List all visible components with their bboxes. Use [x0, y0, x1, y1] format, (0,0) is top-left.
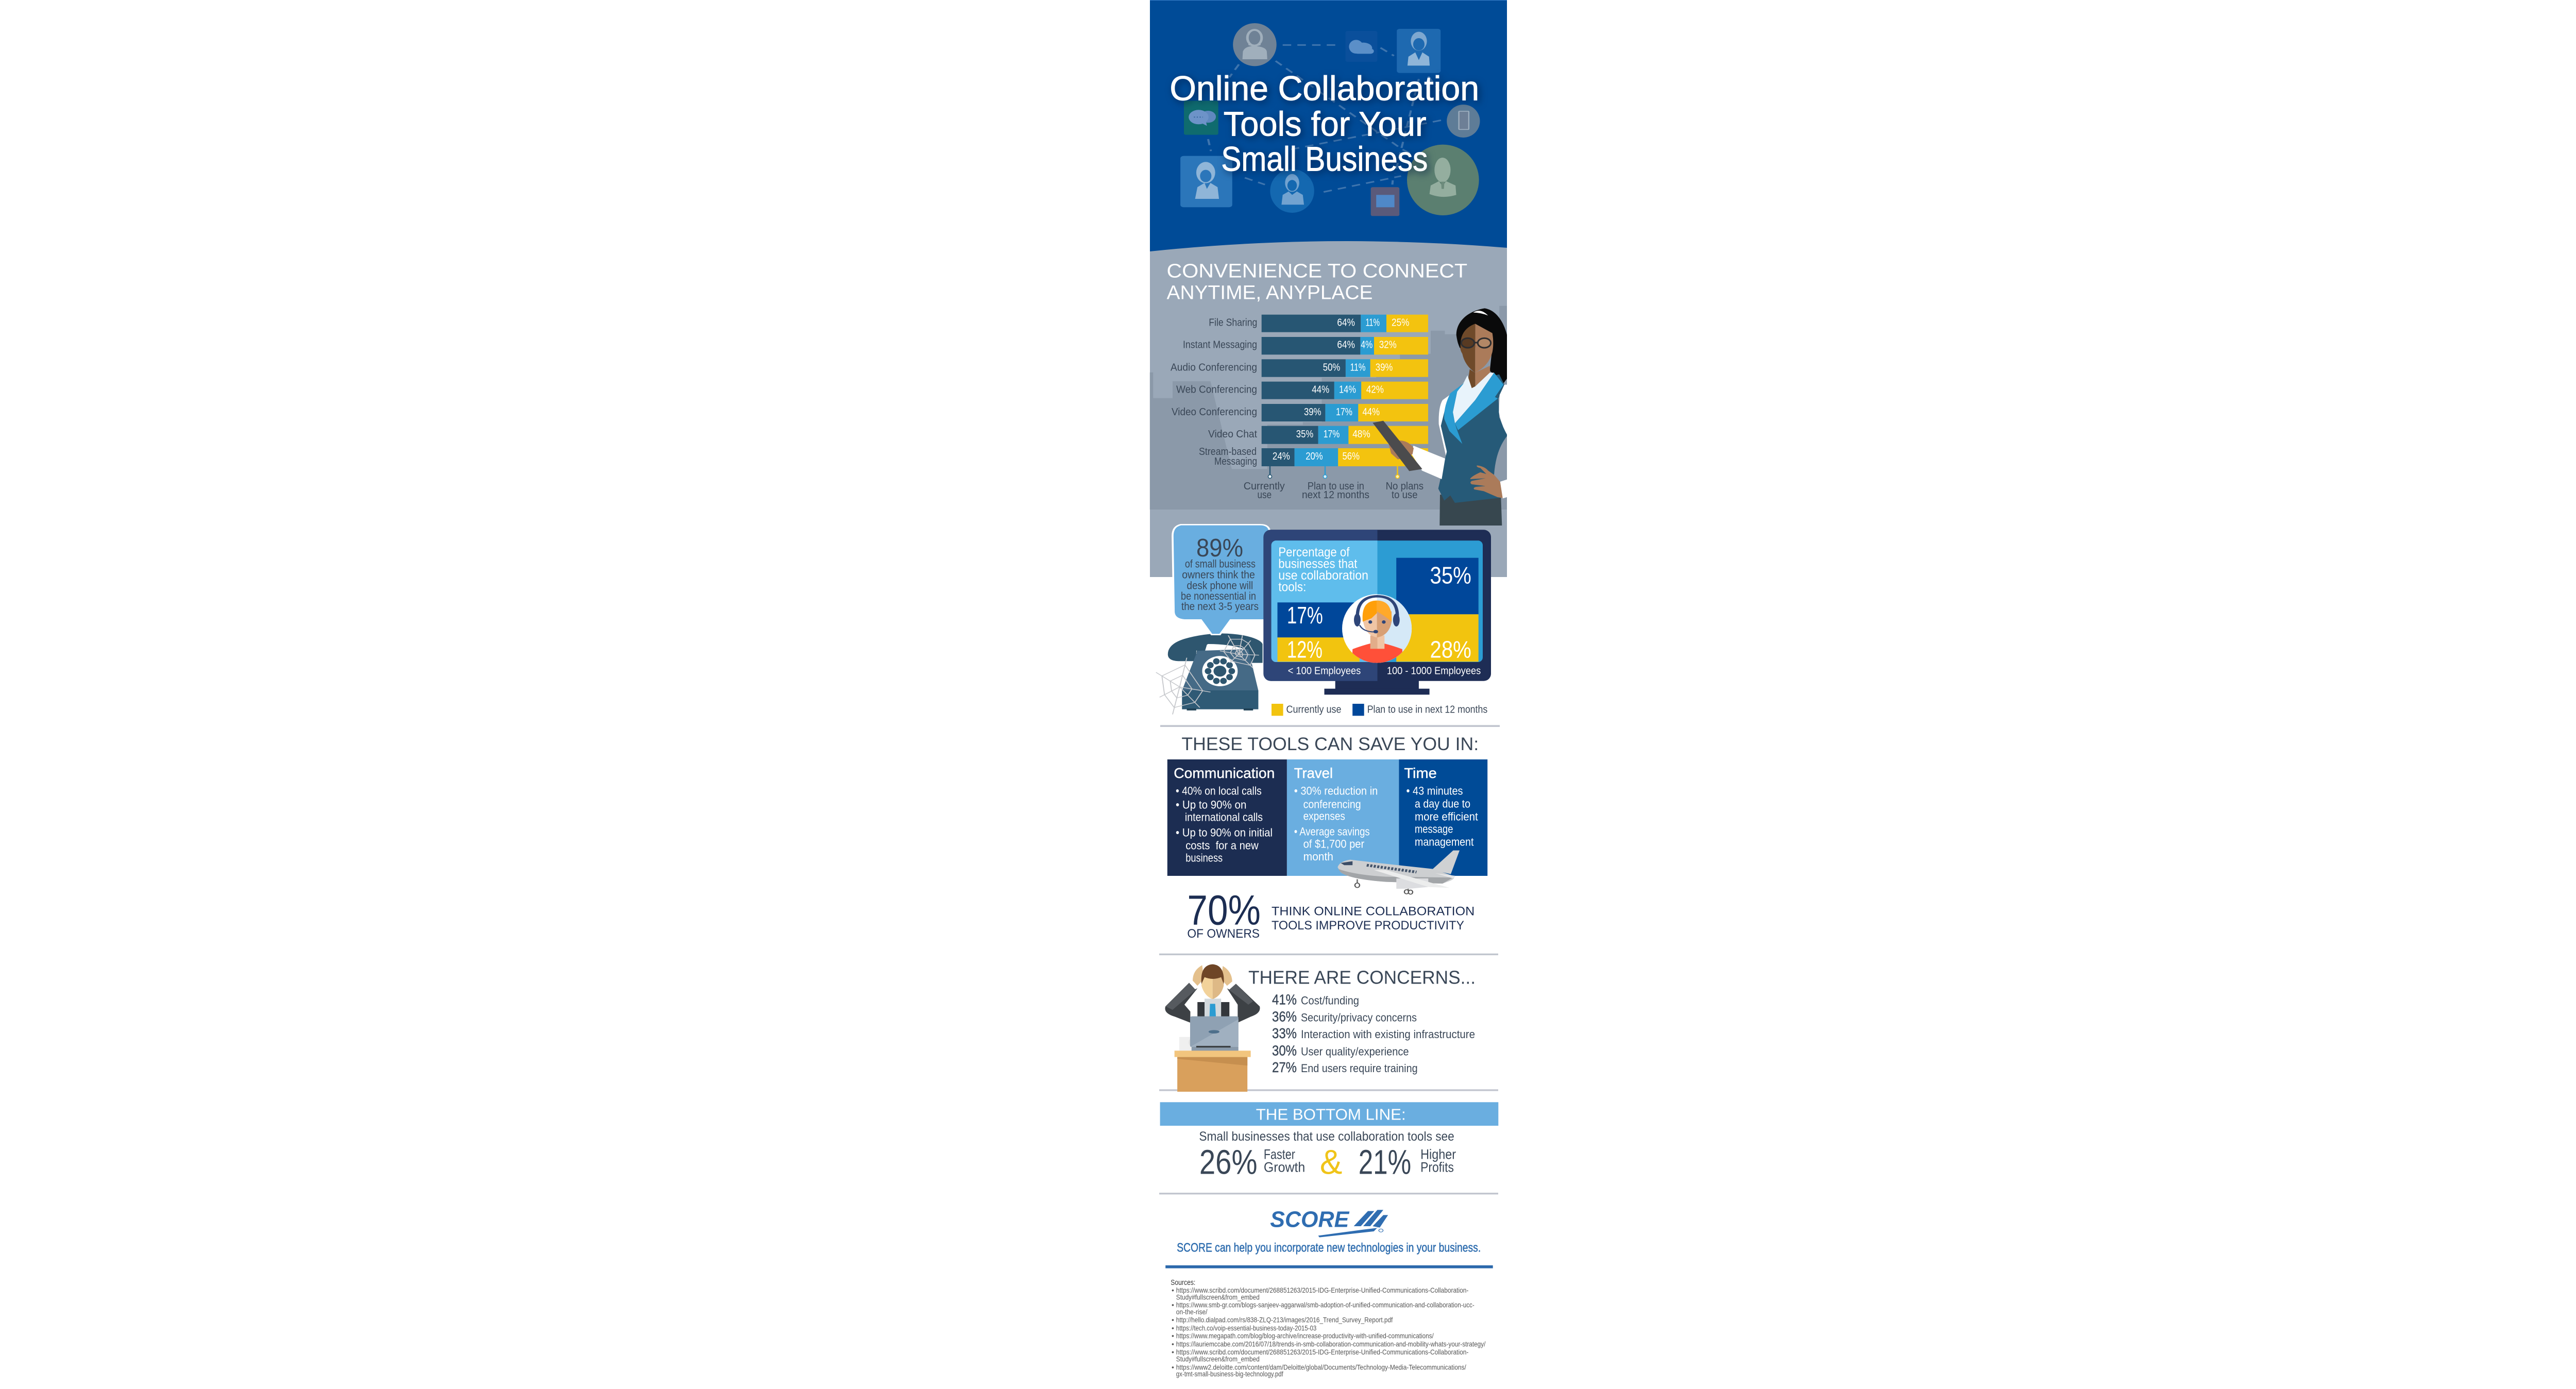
row: Audio Conferencing: 11% [1350, 362, 1366, 373]
chart values: 12% [1287, 636, 1323, 663]
illustration: businesswoman with tablet [1372, 308, 1507, 526]
legend: bar colours: Plan to use in [1308, 481, 1364, 492]
row: Video Chat: 35% [1296, 429, 1313, 440]
stat: 26% faster growth: Growth [1264, 1159, 1305, 1175]
chart heading: use collaboration [1278, 568, 1368, 583]
callout: 89% speech bubble: 89% [1196, 534, 1243, 562]
row: Video Conferencing: Video Conferencing [1172, 406, 1257, 418]
heading: these tools can save you in: THESE TOOLS CAN SAVE YOU IN: [1181, 734, 1479, 754]
stat: 21% higher profits: 21% [1359, 1143, 1411, 1181]
sources list: on-the-rise/ [1176, 1308, 1208, 1316]
row: Web Conferencing: 14% [1339, 384, 1356, 395]
row: Stream-based Messaging [1199, 446, 1428, 467]
list: concerns with percentages: Security/privacy concerns [1301, 1011, 1417, 1024]
column: time: message [1415, 823, 1453, 836]
sources list: • [1172, 1301, 1174, 1309]
row: Video Conferencing: 17% [1336, 406, 1352, 418]
row: Instant Messaging: Instant Messaging [1183, 340, 1257, 351]
column: communication: business [1185, 852, 1223, 865]
column: time: management [1415, 836, 1473, 849]
logo: SCORE [1270, 1207, 1388, 1238]
column: travel: expenses [1303, 810, 1345, 823]
callout: 89% speech bubble [1173, 524, 1269, 635]
illustration: old telephone with cobwebs [1156, 634, 1263, 715]
chart: monitor with employee-size columns [1263, 530, 1491, 694]
chart heading: Percentage of [1278, 545, 1349, 560]
panel: convenience to connect [1150, 241, 1507, 577]
row: Audio Conferencing: 39% [1376, 362, 1393, 373]
stat: 70% of owners [1187, 887, 1475, 941]
section: desk phone and monitor [1156, 524, 1491, 716]
sources list: • [1172, 1363, 1174, 1371]
banner [1160, 1102, 1498, 1126]
chart heading: businesses that [1278, 557, 1357, 571]
row: Web Conferencing: Web Conferencing [1176, 384, 1257, 395]
row: File Sharing: 11% [1365, 317, 1380, 329]
banner: THE BOTTOM LINE: [1256, 1105, 1406, 1123]
row: Video Chat: 48% [1352, 429, 1370, 440]
chart values: 28% [1430, 636, 1471, 663]
panel: savings columns [1167, 759, 1487, 894]
sources list [1171, 1278, 1485, 1378]
illustration: stressed man at desk [1165, 964, 1260, 1092]
sources list: • [1172, 1332, 1174, 1340]
row: File Sharing [1209, 315, 1428, 332]
title: Small Business [1221, 140, 1428, 179]
axis labels: 100 - 1000 Employees [1387, 665, 1481, 676]
row: Stream-based Messaging: Stream-based [1199, 446, 1257, 458]
stat: 70% of owners: 70% [1187, 887, 1261, 934]
sources list: https://www.smb-gr.com/blogs-sanjeev-aggarwal/smb-adoption-of-unified-communication-and-collaboration-ucc- [1176, 1301, 1475, 1309]
column: communication: Communication [1174, 765, 1275, 781]
row: Instant Messaging [1183, 337, 1428, 354]
legend: monitor chart [1272, 704, 1487, 716]
stat: 70% of owners: THINK ONLINE COLLABORATION [1272, 905, 1475, 919]
column: travel: month [1303, 850, 1333, 863]
stat: 21% higher profits: Profits [1420, 1159, 1454, 1175]
tagline: SCORE can help you incorporate new technologies in your business. [1177, 1241, 1481, 1255]
legend: bar colours: to use [1392, 489, 1418, 501]
chart values [1287, 562, 1471, 663]
illustration: network of people and devices [1180, 23, 1480, 216]
axis labels: < 100 Employees [1288, 665, 1361, 676]
column: time [1399, 759, 1487, 876]
stat: 26% faster growth: 26% [1199, 1143, 1257, 1181]
sources list: Sources: [1171, 1278, 1195, 1287]
axis labels [1288, 665, 1481, 676]
stat: 70% of owners: OF OWNERS [1187, 927, 1260, 941]
sources list: • [1172, 1340, 1174, 1348]
list: concerns with percentages: 33% [1272, 1025, 1297, 1041]
column: travel: Travel [1294, 765, 1333, 781]
list: concerns with percentages [1272, 991, 1475, 1075]
list: concerns with percentages: User quality/experience [1301, 1045, 1409, 1058]
callout: 89% speech bubble: owners think the [1182, 569, 1255, 581]
row: Web Conferencing [1176, 382, 1428, 399]
row: Audio Conferencing: 50% [1323, 362, 1340, 373]
sources list: • [1172, 1324, 1174, 1332]
title: Tools for Your [1224, 105, 1427, 143]
column: communication: international calls [1185, 810, 1263, 823]
panel: header [1150, 0, 1507, 258]
list: concerns with percentages: 27% [1272, 1059, 1297, 1075]
column: travel: • 30% reduction in [1294, 785, 1378, 798]
column: travel: of $1,700 per [1303, 838, 1364, 851]
list: concerns with percentages: 36% [1272, 1009, 1297, 1025]
callout: 89% speech bubble: be nonessential in [1181, 590, 1256, 602]
logo: SCORE: SCORE [1270, 1207, 1350, 1232]
title [1170, 69, 1479, 179]
column: travel: • Average savings [1294, 825, 1370, 838]
sources list: https://www2.deloitte.com/content/dam/Deloitte/global/Documents/Technology-Media-Telecommunications/ [1176, 1363, 1466, 1371]
row: Stream-based Messaging: Messaging [1214, 456, 1257, 467]
row: Audio Conferencing: Audio Conferencing [1171, 362, 1257, 373]
column: travel [1287, 759, 1399, 876]
stat: 70% of owners: TOOLS IMPROVE PRODUCTIVITY [1272, 919, 1464, 933]
legend: bar colours: next 12 months [1302, 489, 1369, 501]
column: time: • 43 minutes [1406, 785, 1463, 798]
sources list: https://www.scribd.com/document/268851263/2015-IDG-Enterprise-Unified-Communications-Collaboration- [1176, 1348, 1469, 1356]
sources list: • [1172, 1316, 1174, 1324]
legend: monitor chart: Plan to use in next 12 months [1367, 704, 1487, 715]
sources list: https://lauriemccabe.com/2016/07/18/trends-in-smb-collaboration-communication-and-mobility-whats-your-strategy/ [1176, 1340, 1485, 1348]
sources list: Study#fullscreen&from_embed [1176, 1293, 1260, 1301]
column: communication: • Up to 90% on [1176, 798, 1246, 811]
column: communication: • Up to 90% on initial [1176, 826, 1273, 839]
stat: 21% higher profits: Higher [1420, 1146, 1456, 1162]
stat: 26% faster growth [1199, 1143, 1305, 1181]
row: Video Chat [1208, 426, 1428, 444]
stat: 26% faster growth: Faster [1264, 1146, 1295, 1162]
sources list: http://hello.dialpad.com/rs/838-ZLQ-213/images/2016_Trend_Survey_Report.pdf [1176, 1316, 1393, 1324]
legend: bar colours: Currently [1244, 481, 1285, 492]
column: communication: costs for a new [1185, 839, 1259, 852]
row: File Sharing: 64% [1337, 317, 1355, 329]
row: Audio Conferencing [1171, 359, 1428, 377]
column: travel: conferencing [1303, 798, 1361, 810]
list: concerns with percentages: End users require training [1301, 1062, 1418, 1075]
row: Web Conferencing: 44% [1312, 384, 1329, 395]
title: Online Collaboration [1170, 69, 1479, 108]
row: Video Chat: Video Chat [1208, 429, 1257, 440]
row: Video Conferencing: 39% [1304, 406, 1321, 418]
legend: bar colours: No plans [1386, 481, 1423, 492]
legend: bar colours [1244, 466, 1423, 501]
row: Web Conferencing: 42% [1366, 384, 1384, 395]
sources list: Study#fullscreen&from_embed [1176, 1355, 1260, 1363]
sources list: https://www.scribd.com/document/268851263/2015-IDG-Enterprise-Unified-Communications-Collaboration- [1176, 1286, 1469, 1294]
row: Instant Messaging: 4% [1361, 340, 1372, 351]
callout: 89% speech bubble: the next 3-5 years [1181, 601, 1259, 613]
chart heading: tools: [1278, 580, 1306, 595]
panel: the bottom line [1160, 1102, 1498, 1181]
heading: CONVENIENCE TO CONNECT [1166, 261, 1467, 282]
row: Video Conferencing: 44% [1362, 406, 1380, 418]
panel: concerns [1165, 964, 1476, 1092]
legend: bar colours: use [1257, 489, 1272, 501]
callout: 89% speech bubble: of small business [1185, 558, 1256, 570]
row: Stream-based Messaging: 56% [1343, 451, 1360, 462]
icon: airplane [1337, 851, 1460, 894]
heading: ANYTIME, ANYPLACE [1166, 282, 1372, 304]
legend: monitor chart: Currently use [1286, 704, 1342, 715]
column: time: a day due to [1415, 798, 1470, 810]
row: Stream-based Messaging: 24% [1273, 451, 1290, 462]
row: Stream-based Messaging: 20% [1306, 451, 1323, 462]
column: communication [1167, 759, 1287, 876]
sources list: gx-tmt-small-business-big-technology.pdf [1176, 1370, 1283, 1378]
ampersand: & [1320, 1143, 1343, 1181]
column: time: Time [1404, 765, 1437, 781]
intro text: Small businesses that use collaboration tools see [1199, 1129, 1454, 1144]
column: time: more efficient [1415, 810, 1478, 823]
list: concerns with percentages: 30% [1272, 1042, 1297, 1058]
row: File Sharing: 25% [1392, 317, 1410, 329]
row: Video Chat: 17% [1324, 429, 1340, 440]
skyline background [1150, 306, 1507, 510]
chart heading [1278, 545, 1368, 595]
row: Video Conferencing [1172, 404, 1428, 421]
sources list: https://tech.co/voip-essential-business-today-2015-03 [1176, 1324, 1316, 1332]
heading: there are concerns: THERE ARE CONCERNS... [1248, 967, 1476, 988]
list: concerns with percentages: 41% [1272, 991, 1297, 1007]
stacked bar chart [1171, 315, 1428, 501]
column: communication: • 40% on local calls [1176, 785, 1262, 798]
row: File Sharing: File Sharing [1209, 317, 1257, 329]
chart values: 17% [1287, 602, 1323, 629]
sources list: • [1172, 1286, 1174, 1294]
heading [1166, 261, 1467, 304]
row: Instant Messaging: 32% [1379, 340, 1397, 351]
sources list: https://www.megapath.com/blog/blog-archive/increase-productivity-with-unified-communications/ [1176, 1332, 1434, 1340]
list: concerns with percentages: Interaction with existing infrastructure [1301, 1028, 1475, 1041]
row: Instant Messaging: 64% [1337, 340, 1355, 351]
callout: 89% speech bubble: desk phone will [1187, 580, 1253, 591]
icon: support agent with headset [1342, 594, 1412, 665]
chart values: 35% [1430, 562, 1471, 589]
sources list: • [1172, 1348, 1174, 1356]
list: concerns with percentages: Cost/funding [1301, 994, 1359, 1007]
